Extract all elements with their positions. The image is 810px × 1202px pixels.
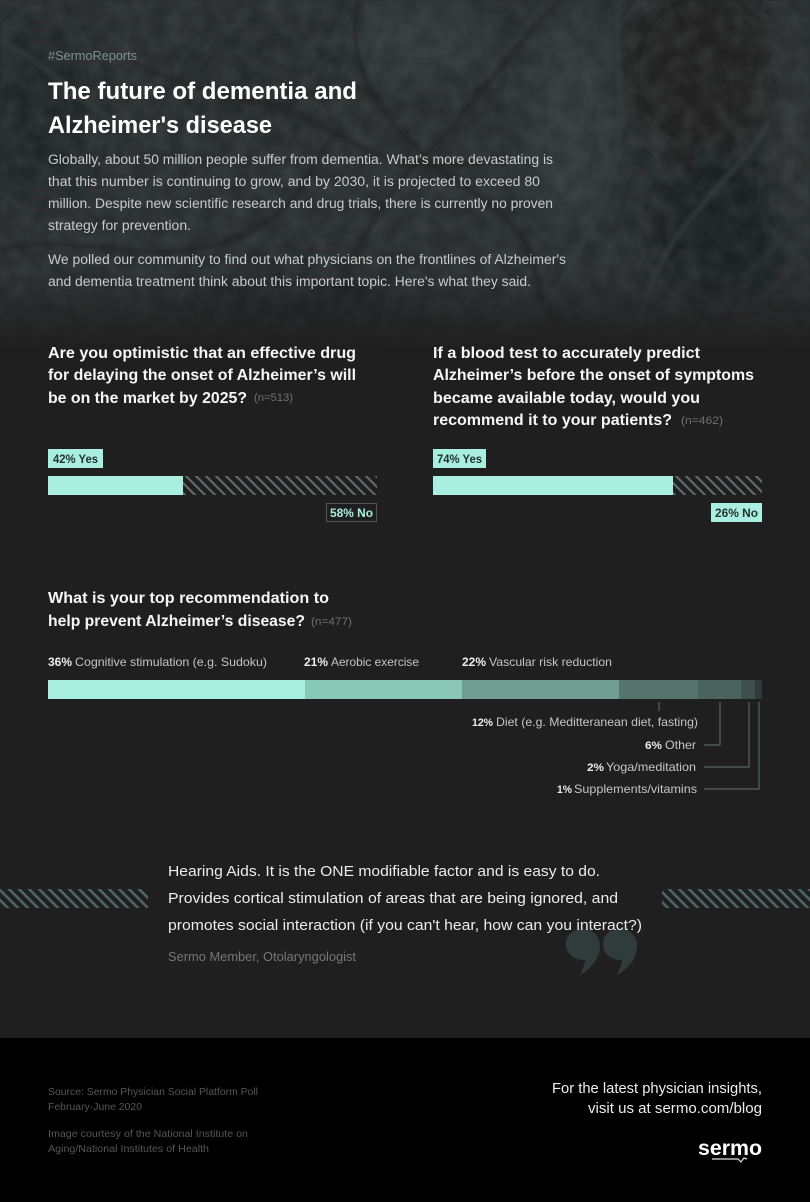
question 1: be on the market by 2025? <box>48 390 247 407</box>
bar: 74 yes 26 no <box>433 476 762 495</box>
title: Alzheimer's disease <box>48 112 272 139</box>
panel: top recommendation <box>48 590 762 796</box>
image credit: Image courtesy of the National Institute on <box>48 1128 248 1140</box>
quote attribution: Sermo Member, Otolaryngologist <box>168 950 357 964</box>
right hatch band <box>662 889 810 908</box>
label: yoga: 2% <box>587 762 604 774</box>
label: cognitive stimulation: Cognitive stimulation (e.g. Sudoku) <box>75 655 267 669</box>
label: diet: Diet (e.g. Meditteranean diet, fasting) <box>496 715 698 729</box>
label: cognitive stimulation: 36% <box>48 655 72 669</box>
icon: closing quote mark <box>566 929 637 975</box>
poll paragraph <box>48 252 566 289</box>
stacked bar <box>48 680 762 699</box>
left hatch band <box>0 889 148 908</box>
no tag 26%: 26% No <box>715 506 758 520</box>
panel: blood test poll <box>433 345 762 522</box>
call to action <box>552 1081 762 1117</box>
leader lines <box>659 702 759 789</box>
label: diet: 12% <box>472 717 493 729</box>
label: other: Other <box>665 738 696 752</box>
hashtag: #SermoReports <box>48 49 137 63</box>
question 2: became available today, would you <box>433 390 700 407</box>
panel: footer <box>0 1038 810 1202</box>
logo: sermo: sermo <box>698 1137 762 1160</box>
label: vascular risk reduction: Vascular risk reduction <box>489 655 612 669</box>
label: other <box>645 738 696 752</box>
no tag 26% <box>711 503 762 522</box>
question 1 <box>48 345 356 407</box>
poll paragraph: and dementia treatment think about this important topic. Here's what they said. <box>48 274 531 289</box>
question 1: (n=513) <box>254 392 293 404</box>
quote text: promotes social interaction (if you can't hear, how can you interact?) <box>168 917 642 934</box>
question 2: recommend it to your patients? <box>433 412 672 429</box>
label: yoga: Yoga/meditation <box>606 760 696 774</box>
intro paragraph: that this number is continuing to grow, and by 2030, it is projected to exceed 80 <box>48 174 540 189</box>
image credit: Aging/National Institutes of Health <box>48 1143 209 1155</box>
header background: neuron photograph texture <box>0 0 810 350</box>
label: other: 6% <box>645 740 662 752</box>
intro paragraph: Globally, about 50 million people suffer from dementia. What’s more devastating is <box>48 152 553 167</box>
label: aerobic exercise: 21% <box>304 655 328 669</box>
yes tag 42%: 42% Yes <box>53 452 98 466</box>
question 3: (n=477) <box>311 616 352 628</box>
question 2: (n=462) <box>681 415 723 427</box>
no tag 58%: 58% No <box>330 506 373 520</box>
title <box>48 78 357 139</box>
no tag 58% <box>326 504 376 522</box>
yes tag 74% <box>433 449 486 468</box>
intro paragraph: million. Despite new scientific research and drug trials, there is currently no proven <box>48 196 553 211</box>
call to action: For the latest physician insights, <box>552 1081 762 1097</box>
quote text: Hearing Aids. It is the ONE modifiable factor and is easy to do. <box>168 863 600 880</box>
image credit <box>48 1128 248 1155</box>
header text block <box>48 49 566 289</box>
intro paragraph <box>48 152 553 233</box>
intro paragraph: strategy for prevention. <box>48 218 191 233</box>
footer background <box>0 1038 810 1202</box>
question 3: What is your top recommendation to <box>48 590 329 607</box>
question 2: If a blood test to accurately predict <box>433 345 701 362</box>
question 3 <box>48 590 352 630</box>
source note: February-June 2020 <box>48 1101 142 1113</box>
source note: Source: Sermo Physician Social Platform Poll <box>48 1086 258 1098</box>
yes tag 42% <box>48 449 103 468</box>
yes tag 74%: 74% Yes <box>437 452 482 466</box>
poll paragraph: We polled our community to find out what physicians on the frontlines of Alzheimer's <box>48 252 566 267</box>
label: aerobic exercise: Aerobic exercise <box>331 655 419 669</box>
quote text: Provides cortical stimulation of areas that are being ignored, and <box>168 890 618 907</box>
label: supplements: Supplements/vitamins <box>574 782 697 796</box>
source note <box>48 1086 258 1113</box>
question 3: help prevent Alzheimer’s disease? <box>48 613 305 630</box>
bar: 42 yes 58 no <box>48 476 377 495</box>
label: supplements: 1% <box>557 784 572 796</box>
panel: drug optimism poll <box>48 345 377 522</box>
question 2 <box>433 345 754 429</box>
call to action: visit us at sermo.com/blog <box>588 1101 762 1117</box>
quote text <box>168 863 642 934</box>
question 1: for delaying the onset of Alzheimer’s will <box>48 367 356 384</box>
label: vascular risk reduction: 22% <box>462 655 486 669</box>
question 2: Alzheimer’s before the onset of symptoms <box>433 367 754 384</box>
title: The future of dementia and <box>48 78 357 105</box>
panel: physician quote <box>0 863 810 975</box>
question 1: Are you optimistic that an effective drug <box>48 345 356 362</box>
